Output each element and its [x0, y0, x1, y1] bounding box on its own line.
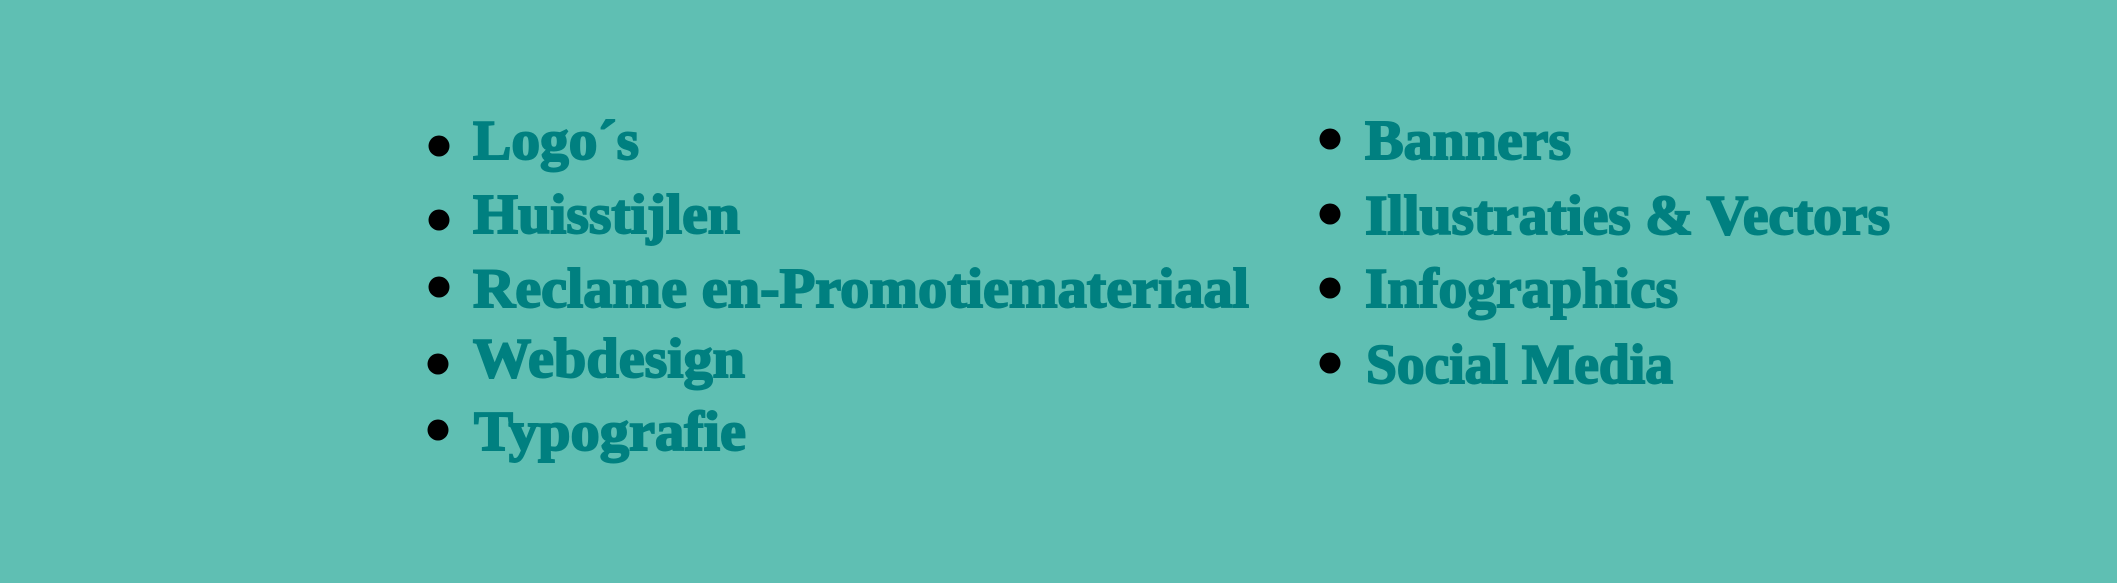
list item: Social Media: Social Media	[1366, 334, 1673, 396]
list item: Huisstijlen: Huisstijlen	[473, 184, 740, 246]
list item: Banners: Banners	[1365, 110, 1571, 172]
list item: Illustraties & Vectors: Illustraties & Vectors	[1365, 185, 1890, 247]
left service list	[428, 110, 1249, 463]
list item: Logo's: Logo´s	[473, 110, 639, 172]
list item: Webdesign: Webdesign	[473, 328, 745, 390]
list item: Reclame en-Promotiemateriaal: Reclame en-Promotiemateriaal	[473, 258, 1249, 320]
list item: Typografie: Typografie	[474, 401, 746, 463]
list item: Infographics: Infographics	[1365, 258, 1678, 320]
right service list	[1320, 110, 1890, 396]
